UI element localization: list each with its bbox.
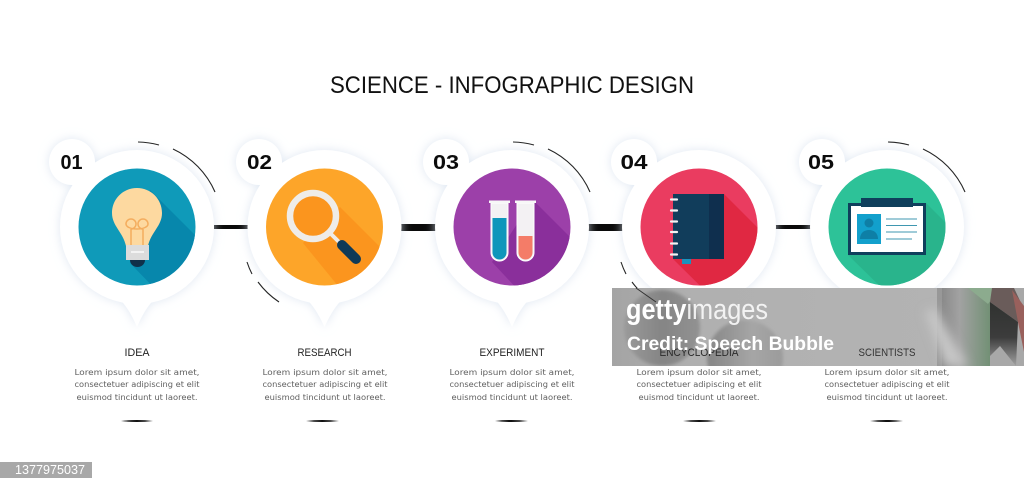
description 1: Lorem ipsum dolor sit amet, (74, 368, 200, 377)
step 3: experiment (423, 139, 610, 422)
description 3: Lorem ipsum dolor sit amet, (450, 368, 574, 377)
step 2: research (236, 139, 420, 422)
connector 1-2 (214, 225, 250, 229)
watermark texture (624, 288, 1024, 366)
decorative arc accent 3 (513, 142, 590, 192)
icon: id card (828, 168, 946, 286)
step 4: encyclopedia (611, 139, 800, 422)
title: SCIENCE - INFOGRAPHIC DESIGN (330, 72, 694, 99)
description 5: euismod tincidunt ut laoreet. (826, 393, 948, 402)
end mark 3 (495, 420, 528, 422)
end mark 4 (683, 420, 716, 422)
description 5: Lorem ipsum dolor sit amet, (824, 368, 950, 377)
end mark 5 (870, 420, 903, 422)
watermark logo: gettyimages (626, 294, 768, 326)
label: scientists: SCIENTISTS (858, 347, 916, 359)
description 2: Lorem ipsum dolor sit amet, (262, 368, 388, 377)
description 4: consectetuer adipiscing et elit (636, 380, 762, 389)
pin background 4 (611, 139, 776, 327)
connector 4-5 (775, 225, 812, 229)
end mark 1 (121, 420, 153, 422)
connector 3-4 (588, 224, 624, 231)
step number 05: 05 (808, 152, 834, 174)
description 2: consectetuer adipiscing et elit (262, 380, 388, 389)
description 3: consectetuer adipiscing et elit (450, 380, 574, 389)
watermark credit: Credit: Speech Bubble (627, 333, 834, 355)
decorative arc accent 2 (247, 262, 279, 302)
step number 03: 03 (433, 152, 459, 174)
decorative arc accent 5 (888, 142, 965, 192)
pin background 3 (423, 139, 589, 327)
step number 02: 02 (247, 152, 272, 174)
description 2: euismod tincidunt ut laoreet. (264, 393, 386, 402)
arc continuation under the band (636, 288, 656, 302)
label: experiment: EXPERIMENT (480, 347, 545, 359)
description 1: consectetuer adipiscing et elit (74, 380, 200, 389)
step number 04: 04 (620, 152, 649, 174)
connector 2-3 (400, 224, 438, 231)
icon: test tubes (454, 168, 570, 286)
pin background 1 (49, 139, 214, 327)
image id tag: 1377975037 (15, 462, 85, 477)
description 5: consectetuer adipiscing et elit (824, 380, 950, 389)
description 1: euismod tincidunt ut laoreet. (76, 393, 198, 402)
label: idea: IDEA (124, 347, 150, 359)
pin background 2 (236, 139, 402, 327)
icon: light bulb (78, 168, 196, 286)
icon: magnifying glass (266, 168, 383, 286)
end mark 2 (306, 420, 339, 422)
pin background 5 (799, 139, 964, 327)
watermark band (612, 288, 1024, 366)
decorative arc accent 4 (621, 262, 653, 302)
decorative arc accent 1 (138, 142, 215, 192)
icon: notebook (640, 168, 758, 286)
step 1: idea (49, 139, 230, 422)
step 5: scientists (799, 139, 990, 422)
description 4: euismod tincidunt ut laoreet. (638, 393, 760, 402)
description 4: Lorem ipsum dolor sit amet, (636, 368, 762, 377)
label: encyclopedia: ENCYCLOPEDIA (660, 347, 739, 359)
label: research: RESEARCH (298, 347, 352, 359)
description 3: euismod tincidunt ut laoreet. (452, 393, 572, 402)
step number 01: 01 (60, 152, 82, 174)
